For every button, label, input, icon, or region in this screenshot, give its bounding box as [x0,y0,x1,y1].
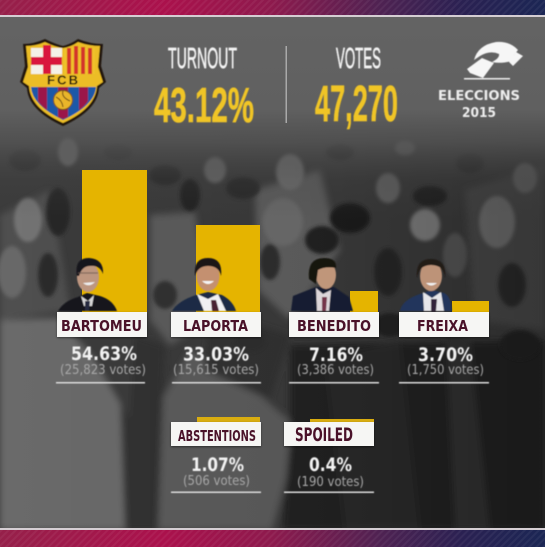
name label: Abstentions: ABSTENTIONS [178,427,256,445]
name label: Bartomeu: BARTOMEU [61,317,142,335]
text: Eleccions 2015 [438,89,520,121]
icon: FC Barcelona crest [20,39,106,126]
result: Laporta: (15,615 votes) [173,362,259,378]
candidate: Freixa [399,259,489,384]
result: Spoiled: (190 votes) [297,474,364,490]
result: Spoiled [284,454,374,493]
stat: votes: VOTES [336,43,381,75]
icon: ballot box hand [464,42,523,80]
name label: Freixa: FREIXA [417,317,468,335]
stat: turnout: TURNOUT [168,43,237,75]
result: Laporta [172,344,261,384]
stat: votes [315,43,398,132]
result: Freixa: (1,750 votes) [407,362,484,378]
result: Abstentions: (506 votes) [183,473,250,489]
result: Freixa: 3.70% [418,344,473,366]
stat: turnout [154,43,254,133]
category: Abstentions [171,417,261,493]
result: Bartomeu: (25,823 votes) [60,362,146,378]
text: Eleccions 2015: 2015 [462,106,496,121]
result: Freixa [399,344,489,384]
bar: Bartomeu [82,170,147,312]
result: Benedito [289,344,379,384]
result: Benedito: 7.16% [309,344,363,366]
candidate: Benedito [289,258,379,384]
bottom band [0,528,545,547]
divider [286,46,287,123]
top band [0,0,545,17]
result: Bartomeu: 54.63% [71,343,137,365]
bar: Abstentions [197,417,260,422]
result: Abstentions: 1.07% [191,454,244,476]
icon: FC Barcelona crest: FCB [47,72,78,88]
result: Spoiled: 0.4% [309,454,352,476]
result: Laporta: 33.03% [183,344,249,366]
candidate: Laporta [171,225,261,384]
portrait: Benedito [291,258,353,311]
result: Bartomeu [56,343,146,384]
name label: Laporta: LAPORTA [183,317,248,335]
candidate: Bartomeu [56,170,147,384]
bar: Laporta [196,225,260,312]
bar: Benedito [350,291,378,312]
result: Benedito: (3,386 votes) [297,362,374,378]
stat: turnout: 43.12% [154,79,254,133]
bar: Spoiled [310,419,374,422]
category: Spoiled [284,419,374,493]
name label: Benedito: BENEDITO [297,317,371,335]
bar: Freixa [452,301,489,312]
name label: Laporta [171,312,261,337]
text: Eleccions 2015: ELECCIONS [438,89,520,104]
portrait: Laporta [172,258,236,311]
name label: Bartomeu [57,312,147,337]
stat: votes: 47,270 [315,75,398,132]
portrait: Freixa [400,259,452,311]
result: Abstentions [171,454,261,493]
name label: Spoiled: SPOILED [295,425,353,446]
portrait: Bartomeu [58,258,117,311]
